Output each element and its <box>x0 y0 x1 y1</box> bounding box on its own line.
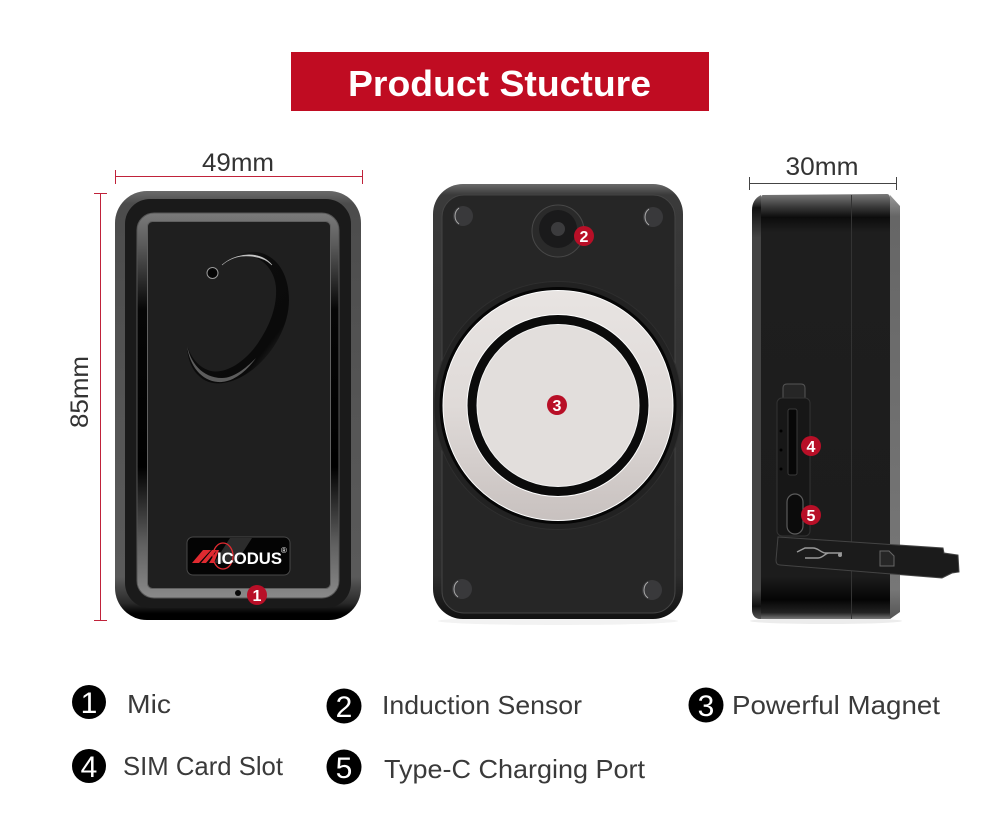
dimension: width 49mm: 49mm <box>202 149 274 177</box>
SIM tray <box>777 384 810 536</box>
side right rim <box>890 195 900 619</box>
front grey ring <box>137 213 339 598</box>
dimension: depth 30mm: 30mm <box>786 153 858 181</box>
legend 3: Powerful Magnet: 3 <box>698 690 714 723</box>
marker 4: 4 <box>807 439 816 456</box>
marker 3 <box>547 395 567 415</box>
marker 5: 5 <box>807 508 816 525</box>
device: front view <box>115 191 361 620</box>
swoosh logo <box>187 252 289 383</box>
dimension: depth 30mm <box>750 153 896 190</box>
legend 4: SIM Card Slot: 4 <box>81 751 97 784</box>
legend 1: Mic <box>72 685 171 720</box>
rubber cap <box>776 537 959 578</box>
device: side view <box>750 194 959 624</box>
legend 1: Mic: 1 <box>81 687 97 720</box>
marker 3: 3 <box>553 398 562 415</box>
legend 5: Type-C Charging Port <box>326 750 646 785</box>
marker 5 <box>801 505 821 525</box>
corner screws <box>452 206 663 600</box>
induction sensor <box>532 205 584 257</box>
legend 5: Type-C Charging Port: 5 <box>336 752 352 785</box>
legend 4: SIM Card Slot: SIM Card Slot <box>123 751 284 781</box>
side left rim <box>752 195 761 619</box>
swoosh top highlight <box>222 255 272 265</box>
legend 2: Induction Sensor: Induction Sensor <box>382 690 582 720</box>
marker 2: 2 <box>580 229 589 246</box>
brand badge: ICODUS <box>217 549 282 568</box>
legend 3: Powerful Magnet: Powerful Magnet <box>732 690 941 720</box>
marker 1 <box>247 585 267 605</box>
Type-C port <box>787 494 803 534</box>
dimension: height 85mm <box>66 193 107 620</box>
side body <box>761 194 890 619</box>
marker 4 <box>801 436 821 456</box>
brand badge <box>187 537 290 575</box>
brand badge: ® <box>281 546 287 555</box>
magnet <box>434 282 682 530</box>
dimension: height 85mm: 85mm <box>66 356 94 428</box>
mic hole <box>235 590 241 596</box>
legend 5: Type-C Charging Port: Type-C Charging Port <box>384 754 646 784</box>
swoosh lower highlight <box>187 345 256 382</box>
swoosh dot <box>207 268 218 278</box>
title banner: Product Stucture <box>348 63 651 104</box>
device: back view <box>433 184 683 625</box>
marker 2 <box>574 226 594 246</box>
legend 3: Powerful Magnet <box>688 688 941 723</box>
legend 2: Induction Sensor <box>326 688 582 724</box>
legend 4: SIM Card Slot <box>72 749 284 784</box>
dimension: width 49mm <box>116 149 362 184</box>
title banner <box>291 52 709 111</box>
legend 1: Mic: Mic <box>127 689 171 719</box>
legend 2: Induction Sensor: 2 <box>336 691 352 724</box>
marker 1: 1 <box>253 588 262 605</box>
front inner panel <box>148 222 330 588</box>
